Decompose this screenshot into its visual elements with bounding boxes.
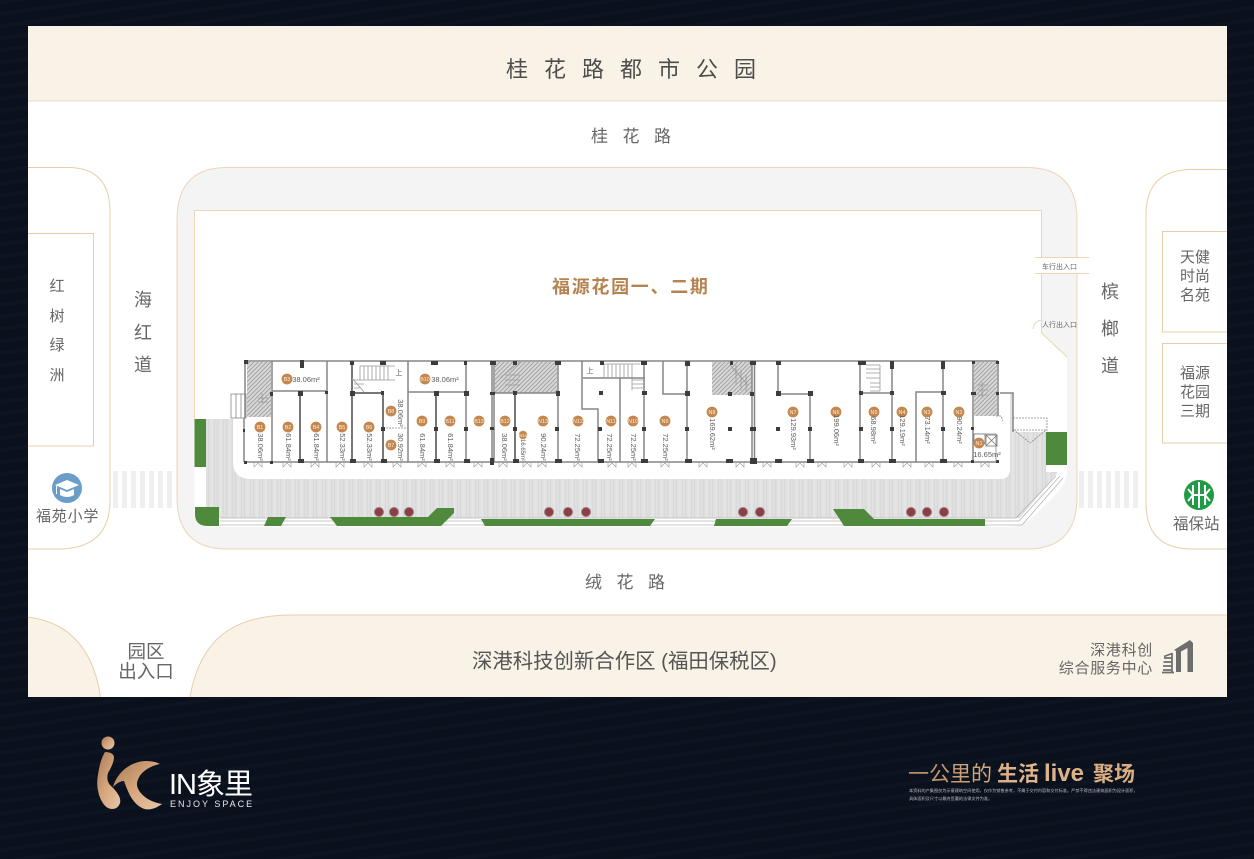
slogan bbox=[908, 760, 1138, 801]
B7: B7 bbox=[388, 443, 394, 449]
block: Tianjian: 时尚 bbox=[1180, 268, 1210, 285]
park entrance label: 园区 bbox=[127, 641, 165, 662]
dashed partition bbox=[383, 427, 408, 429]
road label south: 绒花路 bbox=[585, 573, 680, 592]
right block bbox=[1146, 170, 1227, 549]
heading: park name: 桂花路都市公园 bbox=[506, 57, 772, 82]
N14: 16.65m² bbox=[519, 439, 525, 461]
N5 bbox=[869, 407, 879, 444]
B5 bbox=[337, 422, 347, 461]
doors bbox=[254, 462, 989, 467]
N3: 73.14m² bbox=[923, 416, 932, 444]
stair labels: 上 bbox=[396, 368, 402, 377]
N2: N2 bbox=[956, 410, 962, 416]
N1: 16.65m² bbox=[973, 450, 1001, 459]
block: Fuyuan III: 花园 bbox=[1180, 384, 1210, 401]
vehicle entrance label: 车行出入口 bbox=[1042, 262, 1077, 271]
logo mark bbox=[97, 736, 162, 809]
N5: N5 bbox=[871, 410, 877, 416]
logo tagline: ENJOY SPACE bbox=[170, 799, 254, 809]
B4: 61.84m² bbox=[312, 433, 321, 461]
B10 bbox=[420, 374, 459, 384]
B13 bbox=[474, 416, 484, 426]
N6: N6 bbox=[833, 410, 839, 416]
N7: N7 bbox=[790, 410, 796, 416]
metro label: 福保站 bbox=[1173, 515, 1220, 533]
road labels vertical: 道 bbox=[134, 355, 152, 375]
B10: B10 bbox=[420, 377, 430, 383]
B6: 52.33m² bbox=[365, 433, 374, 461]
N9: 72.25m² bbox=[661, 433, 670, 461]
block: Fuyuan III: 三期 bbox=[1180, 403, 1210, 420]
N10: N10 bbox=[628, 419, 638, 425]
block: Tianjian bbox=[1162, 232, 1227, 332]
slogan: 一公里的 bbox=[908, 763, 992, 786]
B13: B13 bbox=[474, 419, 484, 425]
B2: 61.84m² bbox=[284, 433, 293, 461]
zone name: 深港科技创新合作区 (福田保税区) bbox=[472, 650, 777, 673]
map panel bbox=[28, 26, 1227, 697]
N11: N11 bbox=[606, 419, 616, 425]
N4 bbox=[897, 407, 907, 446]
B9: B9 bbox=[419, 419, 425, 425]
N8: N8 bbox=[709, 410, 715, 416]
corner plot bbox=[28, 617, 100, 697]
N7: 129.93m² bbox=[789, 418, 798, 450]
bottom band bbox=[28, 615, 1227, 697]
N4: 129.19m² bbox=[898, 414, 907, 446]
logo wordmark: IN象里 bbox=[169, 768, 252, 801]
walls bbox=[244, 361, 1013, 462]
B10: 38.06m² bbox=[431, 375, 459, 384]
service centre label: 综合服务中心 bbox=[1059, 660, 1153, 677]
N12 bbox=[573, 416, 583, 461]
slogan: 聚场 bbox=[1093, 763, 1135, 786]
block name: 红 bbox=[49, 278, 65, 295]
B12: 38.06m² bbox=[500, 433, 509, 461]
block: Fuyuan III bbox=[1162, 344, 1227, 443]
N6: 199.06m² bbox=[832, 414, 841, 446]
disclaimer: 具体面积及尺寸以最终签署的法律文件为准。 bbox=[909, 795, 992, 801]
B11 bbox=[445, 416, 455, 461]
N2 bbox=[954, 407, 964, 444]
B2 bbox=[283, 422, 293, 461]
B3: B3 bbox=[284, 377, 290, 383]
N14: N14 bbox=[519, 433, 528, 438]
pedestrian entrance label bbox=[1033, 320, 1077, 329]
left block bbox=[28, 168, 110, 549]
road labels vertical: 红 bbox=[134, 323, 152, 343]
B4 bbox=[311, 422, 321, 461]
B8: 38.06m² bbox=[396, 399, 405, 427]
N10 bbox=[628, 416, 638, 461]
park entrance label: 出入口 bbox=[118, 661, 174, 682]
N1 core bbox=[974, 434, 997, 446]
disclaimer: 本资料的产集图仅为示意建筑空间使用，仅作为销售参考，不属于交付内容和交付标准。严禁不得违法建筑面积为设计面积， bbox=[909, 787, 1138, 793]
school label: 福苑小学 bbox=[36, 508, 99, 525]
room labels west wing bbox=[255, 374, 510, 461]
innovation zone plot bbox=[190, 615, 1227, 697]
heavy walls bbox=[300, 361, 515, 462]
B9: 61.84m² bbox=[418, 433, 427, 461]
B9 bbox=[417, 416, 427, 461]
brand logo bbox=[97, 736, 254, 809]
road labels vertical: 海 bbox=[134, 290, 152, 310]
B8 bbox=[386, 399, 405, 427]
B1: 38.06m² bbox=[256, 433, 265, 461]
N4: N4 bbox=[899, 410, 905, 416]
building floor plan bbox=[231, 360, 1047, 467]
B2: B2 bbox=[285, 425, 291, 431]
B12 bbox=[500, 416, 510, 461]
block: Tianjian: 名苑 bbox=[1180, 287, 1210, 304]
B7 bbox=[386, 433, 405, 461]
trees bbox=[374, 508, 948, 516]
B4: B4 bbox=[313, 425, 319, 431]
vehicle entrance label bbox=[1035, 257, 1090, 274]
B8: B8 bbox=[388, 409, 394, 415]
N8: 169.62m² bbox=[708, 418, 717, 450]
icon: building bbox=[1162, 640, 1193, 672]
N8 bbox=[707, 407, 717, 450]
N13: N13 bbox=[538, 419, 548, 425]
N11 bbox=[605, 416, 616, 461]
B5: 52.33m² bbox=[338, 433, 347, 461]
N3 bbox=[922, 407, 932, 444]
B12: B12 bbox=[500, 419, 510, 425]
N13 bbox=[538, 416, 548, 461]
block name: 树 bbox=[49, 308, 65, 325]
N12: N12 bbox=[573, 419, 583, 425]
B1 bbox=[255, 422, 265, 461]
stair label centre: 上 bbox=[586, 366, 594, 375]
pedestrian entrance label: 人行出入口 bbox=[1042, 320, 1077, 329]
icon: school bbox=[52, 473, 82, 503]
paved plaza bbox=[206, 393, 1058, 518]
N1: N1 bbox=[976, 441, 982, 447]
N7 bbox=[788, 407, 798, 450]
road label north: 桂花路 bbox=[591, 127, 686, 146]
B3: 38.06m² bbox=[292, 375, 320, 384]
N10: 72.25m² bbox=[629, 433, 638, 461]
B1: B1 bbox=[257, 425, 263, 431]
slogan: live bbox=[1044, 760, 1084, 787]
N12: 72.25m² bbox=[573, 433, 582, 461]
site ring road bbox=[177, 168, 1090, 549]
crosswalks bbox=[113, 471, 1138, 508]
park band bbox=[28, 26, 1227, 101]
block name: 洲 bbox=[49, 367, 65, 384]
road label east: 榔 bbox=[1101, 319, 1119, 339]
N1 bbox=[973, 438, 1001, 459]
B6 bbox=[364, 422, 374, 461]
N6 bbox=[831, 407, 841, 446]
compound title: 福源花园一、二期 bbox=[552, 277, 710, 297]
B3 bbox=[282, 374, 320, 384]
B11: 61.84m² bbox=[446, 433, 455, 461]
block: Tianjian: 天健 bbox=[1180, 249, 1210, 266]
N5: 68.98m² bbox=[869, 416, 878, 444]
slogan: 生活 bbox=[997, 763, 1039, 786]
N13: 90.24m² bbox=[539, 433, 548, 461]
N3: N3 bbox=[924, 410, 930, 416]
N14 bbox=[519, 431, 528, 461]
N9 bbox=[660, 416, 670, 461]
B11: B11 bbox=[445, 419, 455, 425]
paved edge lines bbox=[220, 476, 1063, 525]
N11: 72.25m² bbox=[605, 433, 614, 461]
grass strips bbox=[194, 419, 1067, 526]
road label east: 槟 bbox=[1101, 282, 1119, 302]
icon: metro bbox=[1184, 480, 1214, 510]
columns bbox=[243, 360, 999, 465]
B6: B6 bbox=[366, 425, 372, 431]
B7: 30.92m² bbox=[396, 433, 405, 461]
road label east: 道 bbox=[1101, 356, 1119, 376]
N2: 90.24m² bbox=[955, 416, 964, 444]
block name: 绿 bbox=[49, 337, 65, 354]
hatched cores bbox=[247, 362, 997, 417]
N9: N9 bbox=[662, 419, 668, 425]
room labels east wing bbox=[519, 407, 1001, 461]
block: Fuyuan III: 福源 bbox=[1180, 365, 1210, 382]
side entrances bbox=[231, 393, 1047, 462]
service centre label: 深港科创 bbox=[1090, 642, 1153, 659]
B5: B5 bbox=[339, 425, 345, 431]
stairs bbox=[258, 362, 988, 403]
